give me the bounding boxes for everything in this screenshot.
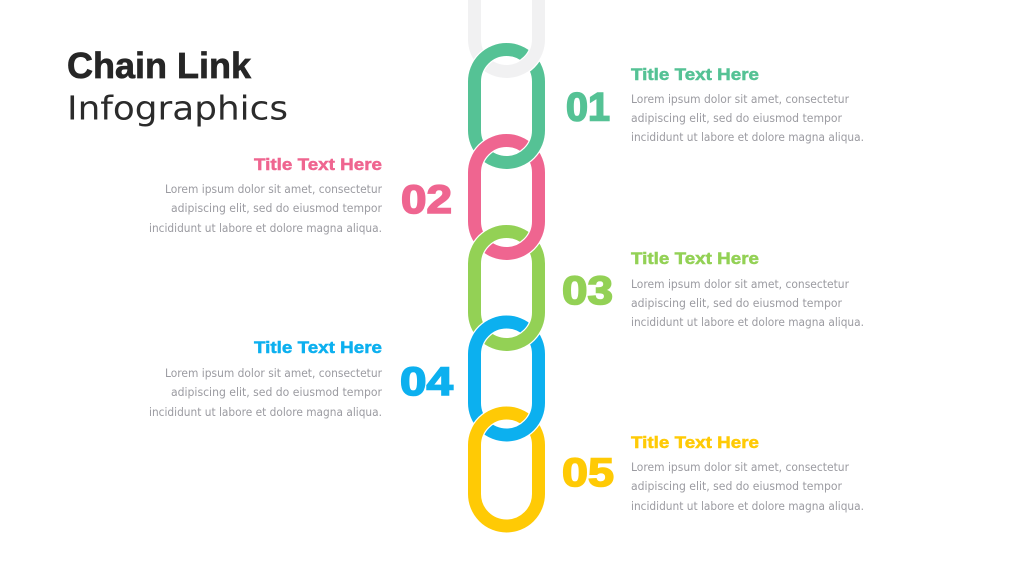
item 05: Title Text Here (631, 433, 759, 452)
chain graphic (474, 0, 538, 526)
item 01: Lorem ipsum dolor sit amet, consectetur (631, 93, 849, 106)
item 02: Title Text Here (254, 155, 382, 174)
item 02: adipiscing elit, sed do eiusmod tempor (171, 202, 382, 215)
item 04: incididunt ut labore et dolore magna aliqua. (149, 406, 382, 419)
item 03: Title Text Here (631, 249, 759, 268)
item 03: adipiscing elit, sed do eiusmod tempor (631, 297, 842, 310)
item 01 (566, 65, 864, 144)
item 05: Lorem ipsum dolor sit amet, consectetur (631, 461, 849, 474)
item 05: adipiscing elit, sed do eiusmod tempor (631, 480, 842, 493)
item 03: 03 (562, 269, 613, 313)
item 01: incididunt ut labore et dolore magna aliqua. (631, 131, 864, 144)
item 01: Title Text Here (631, 65, 759, 84)
item 03: Lorem ipsum dolor sit amet, consectetur (631, 278, 849, 291)
title: Infographics (67, 88, 288, 128)
item 01: 01 (566, 86, 610, 130)
item 02: 02 (401, 178, 452, 222)
item 04 (149, 338, 454, 419)
item 05: incididunt ut labore et dolore magna aliqua. (631, 500, 864, 513)
item 02: Lorem ipsum dolor sit amet, consectetur (165, 183, 382, 196)
title (67, 45, 288, 128)
item 04: 04 (400, 360, 454, 404)
item 03 (562, 249, 864, 329)
item 03: incididunt ut labore et dolore magna aliqua. (631, 316, 864, 329)
title: Chain Link (67, 45, 252, 86)
item 05: 05 (562, 451, 614, 495)
item 01: adipiscing elit, sed do eiusmod tempor (631, 112, 842, 125)
item 02 (149, 155, 452, 235)
item 02: incididunt ut labore et dolore magna aliqua. (149, 222, 382, 235)
item 05 (562, 433, 864, 513)
item 04: Lorem ipsum dolor sit amet, consectetur (165, 367, 382, 380)
item 04: adipiscing elit, sed do eiusmod tempor (171, 386, 382, 399)
item 04: Title Text Here (254, 338, 382, 357)
